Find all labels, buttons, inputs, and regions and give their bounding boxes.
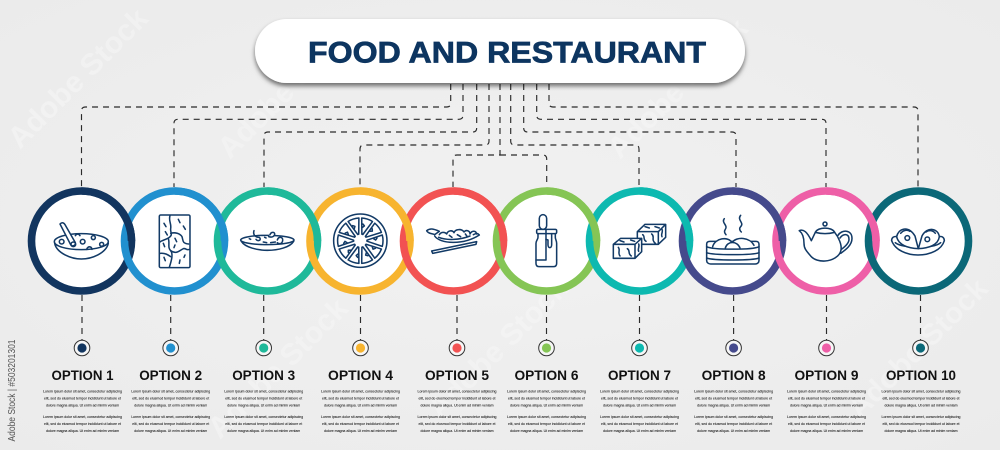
option 7 block: OPTION 7 bbox=[608, 368, 671, 383]
option 10 block: dolore magna aliqua. Ut enim ad minim veniam bbox=[884, 402, 958, 407]
option 4 block: Lorem ipsum dolor sit amet, consectetur adipiscing bbox=[321, 388, 400, 393]
option 10 block: elit, sed do eiusmod tempor incididunt ut labore et bbox=[882, 421, 960, 426]
icon: two cubes bbox=[613, 224, 666, 258]
option 2 block bbox=[131, 340, 210, 433]
background watermark: Adobe Stock bbox=[2, 2, 155, 155]
background watermark: Adobe Stock bbox=[602, 12, 755, 165]
option 1 block bbox=[43, 340, 122, 433]
option 10 block: dolore magna aliqua. Ut enim ad minim veniam bbox=[884, 428, 958, 433]
icon: dropper bottle bbox=[536, 215, 557, 267]
icon: pizza bbox=[334, 214, 387, 267]
option 5 block: Lorem ipsum dolor sit amet, consectetur adipiscing bbox=[418, 414, 496, 419]
option 6 block: Lorem ipsum dolor sit amet, consectetur adipiscing bbox=[507, 388, 586, 393]
option 2 block: Lorem ipsum dolor sit amet, consectetur adipiscing bbox=[131, 414, 210, 419]
option 10 block: Lorem ipsum dolor sit amet, consectetur adipiscing bbox=[882, 388, 960, 393]
option 4 block: dolore magna aliqua. Ut enim ad minim veniam bbox=[324, 402, 397, 407]
option 10 block bbox=[882, 340, 960, 433]
option 5 block: elit, sed do eiusmod tempor incididunt ut labore et bbox=[418, 395, 496, 400]
title pill: FOOD AND RESTAURANT bbox=[308, 36, 706, 69]
option 2 block: dolore magna aliqua. Ut enim ad minim veniam bbox=[134, 428, 207, 433]
background watermark: Adobe Stock bbox=[202, 292, 355, 445]
option 1 block: Lorem ipsum dolor sit amet, consectetur adipiscing bbox=[43, 388, 122, 393]
option 9 block bbox=[787, 340, 866, 433]
background watermark: Adobe Stock bbox=[842, 272, 995, 425]
icon: plate with chopsticks bbox=[427, 229, 479, 253]
option 5 block bbox=[418, 340, 496, 433]
option 5 block: OPTION 5 bbox=[425, 368, 489, 383]
option 6 block: OPTION 6 bbox=[514, 368, 579, 383]
option 6 block bbox=[507, 340, 586, 433]
option 6 block: dolore magna aliqua. Ut enim ad minim veniam bbox=[510, 402, 583, 407]
option 3 block: elit, sed do eiusmod tempor incididunt ut labore et bbox=[225, 421, 303, 426]
title pill bbox=[255, 19, 745, 83]
option 1 block: Lorem ipsum dolor sit amet, consectetur adipiscing bbox=[43, 414, 122, 419]
option 8 block bbox=[694, 340, 773, 433]
option 2 block: dolore magna aliqua. Ut enim ad minim veniam bbox=[134, 402, 207, 407]
option 3 block: dolore magna aliqua. Ut enim ad minim veniam bbox=[227, 402, 300, 407]
option 10 block: OPTION 10 bbox=[886, 368, 956, 383]
icon: soup bowl bbox=[54, 223, 108, 259]
option 6 block: dolore magna aliqua. Ut enim ad minim veniam bbox=[510, 428, 583, 433]
option 9 block: elit, sed do eiusmod tempor incididunt ut labore et bbox=[788, 395, 866, 400]
icon: plate with mussels bbox=[892, 229, 944, 255]
option 7 block: elit, sed do eiusmod tempor incididunt ut labore et bbox=[601, 421, 679, 426]
option 9 block: elit, sed do eiusmod tempor incididunt ut labore et bbox=[788, 421, 866, 426]
option 7 block: dolore magna aliqua. Ut enim ad minim veniam bbox=[603, 402, 676, 407]
option 3 block: dolore magna aliqua. Ut enim ad minim veniam bbox=[227, 428, 300, 433]
option 1 block: elit, sed do eiusmod tempor incididunt ut labore et bbox=[44, 421, 122, 426]
option 8 block: dolore magna aliqua. Ut enim ad minim veniam bbox=[697, 428, 770, 433]
option 9 block: OPTION 9 bbox=[794, 368, 858, 383]
option 3 block: OPTION 3 bbox=[232, 368, 296, 383]
option 7 block: Lorem ipsum dolor sit amet, consectetur adipiscing bbox=[600, 414, 679, 419]
option 7 block: dolore magna aliqua. Ut enim ad minim veniam bbox=[603, 428, 676, 433]
option 3 block: elit, sed do eiusmod tempor incididunt ut labore et bbox=[225, 395, 303, 400]
option 3 block: Lorem ipsum dolor sit amet, consectetur adipiscing bbox=[224, 388, 303, 393]
icon: teapot bbox=[799, 222, 852, 261]
icon: cracked bar bbox=[159, 215, 190, 268]
option 1 block: elit, sed do eiusmod tempor incididunt ut labore et bbox=[44, 395, 122, 400]
option 10 block: elit, sed do eiusmod tempor incididunt ut labore et bbox=[882, 395, 960, 400]
option 4 block: Lorem ipsum dolor sit amet, consectetur adipiscing bbox=[321, 414, 400, 419]
option 1 block: dolore magna aliqua. Ut enim ad minim veniam bbox=[46, 428, 119, 433]
option 9 block: Lorem ipsum dolor sit amet, consectetur adipiscing bbox=[787, 414, 866, 419]
option 7 block: elit, sed do eiusmod tempor incididunt ut labore et bbox=[601, 395, 679, 400]
option 2 block: OPTION 2 bbox=[139, 368, 202, 383]
icon: plate with seafood bbox=[241, 231, 294, 250]
option 8 block: dolore magna aliqua. Ut enim ad minim veniam bbox=[697, 402, 770, 407]
connectors from circles to nodes bbox=[82, 295, 920, 340]
option 8 block: elit, sed do eiusmod tempor incididunt ut labore et bbox=[695, 421, 773, 426]
option 9 block: Lorem ipsum dolor sit amet, consectetur adipiscing bbox=[787, 388, 866, 393]
option 3 block: Lorem ipsum dolor sit amet, consectetur adipiscing bbox=[224, 414, 303, 419]
option 10 block: Lorem ipsum dolor sit amet, consectetur adipiscing bbox=[882, 414, 960, 419]
option 6 block: elit, sed do eiusmod tempor incididunt ut labore et bbox=[508, 421, 586, 426]
option 8 block: elit, sed do eiusmod tempor incididunt ut labore et bbox=[695, 395, 773, 400]
background watermark: Adobe Stock bbox=[212, 12, 365, 165]
option 4 block: dolore magna aliqua. Ut enim ad minim veniam bbox=[324, 428, 397, 433]
option 1 block: OPTION 1 bbox=[52, 368, 114, 383]
option 5 block: elit, sed do eiusmod tempor incididunt ut labore et bbox=[418, 421, 496, 426]
interlocking white discs and coloured rings bbox=[32, 191, 968, 291]
option 1 block: dolore magna aliqua. Ut enim ad minim veniam bbox=[46, 402, 119, 407]
option 6 block: elit, sed do eiusmod tempor incididunt ut labore et bbox=[508, 395, 586, 400]
option 4 block bbox=[321, 340, 400, 433]
option 2 block: elit, sed do eiusmod tempor incididunt ut labore et bbox=[132, 395, 210, 400]
option 5 block: Lorem ipsum dolor sit amet, consectetur adipiscing bbox=[418, 388, 496, 393]
option 8 block: Lorem ipsum dolor sit amet, consectetur adipiscing bbox=[694, 388, 773, 393]
option 8 block: Lorem ipsum dolor sit amet, consectetur adipiscing bbox=[694, 414, 773, 419]
option 8 block: OPTION 8 bbox=[702, 368, 766, 383]
option 4 block: elit, sed do eiusmod tempor incididunt ut labore et bbox=[322, 395, 400, 400]
connectors from title to circles bbox=[82, 84, 918, 187]
option 9 block: dolore magna aliqua. Ut enim ad minim veniam bbox=[790, 402, 863, 407]
option 7 block bbox=[600, 340, 679, 433]
option 6 block: Lorem ipsum dolor sit amet, consectetur adipiscing bbox=[507, 414, 586, 419]
option 9 block: dolore magna aliqua. Ut enim ad minim veniam bbox=[790, 428, 863, 433]
option 5 block: dolore magna aliqua. Ut enim ad minim veniam bbox=[420, 402, 494, 407]
background watermark: Adobe Stock bbox=[422, 272, 575, 425]
option 7 block: Lorem ipsum dolor sit amet, consectetur adipiscing bbox=[600, 388, 679, 393]
option 4 block: OPTION 4 bbox=[328, 368, 394, 383]
stock id side label: Adobe Stock | #503201301 bbox=[7, 339, 18, 442]
option 5 block: dolore magna aliqua. Ut enim ad minim veniam bbox=[420, 428, 494, 433]
icon: steamed buns bbox=[707, 215, 759, 264]
option 2 block: elit, sed do eiusmod tempor incididunt ut labore et bbox=[132, 421, 210, 426]
option 2 block: Lorem ipsum dolor sit amet, consectetur adipiscing bbox=[131, 388, 210, 393]
option 4 block: elit, sed do eiusmod tempor incididunt ut labore et bbox=[322, 421, 400, 426]
option 3 block bbox=[224, 340, 303, 433]
